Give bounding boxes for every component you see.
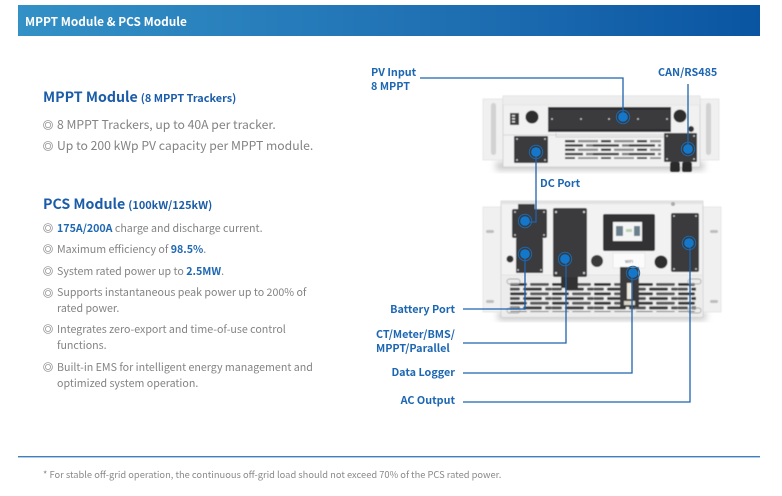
footer rule [18, 456, 760, 457]
bullet: PV capacity: Up to 200 kWp PV capacity per MPPT module. [57, 136, 313, 154]
illustration: PCS module device [483, 201, 721, 320]
callout: AC output [400, 236, 696, 408]
callout: DC port [518, 145, 581, 228]
callout: data logger: Data Logger [391, 364, 455, 380]
callout: PV input [371, 64, 630, 124]
bullet: EMS [44, 360, 313, 391]
callout: data logger [391, 266, 640, 380]
chassis [503, 96, 700, 167]
callout: PV input: 8 MPPT [371, 78, 410, 94]
footnote: * For stable off-grid operation, the continuous off-grid load should not exceed 70% of the PCS rated power. [43, 467, 501, 481]
callout: PV input: PV Input [371, 64, 417, 80]
callout: AC output: AC Output [400, 392, 455, 408]
bullet: zero export [44, 322, 286, 353]
black port panels [512, 204, 699, 288]
heading: MPPT module: MPPT Module (8 MPPT Trackers) [43, 87, 236, 107]
bullet: trackers: 8 MPPT Trackers, up to 40A per tracker. [57, 115, 276, 133]
callout: CT/Meter/BMS/MPPT/Parallel [376, 252, 572, 356]
callout: CT/Meter/BMS/MPPT/Parallel: MPPT/Parallel [376, 340, 450, 356]
bullet: rated power: System rated power up to 2.5MW. [57, 264, 224, 279]
callout: battery port: Battery Port [390, 301, 455, 317]
switch block [510, 113, 519, 125]
callout: DC port: DC Port [540, 175, 581, 191]
CAN panel [664, 133, 697, 172]
PV input panel [548, 107, 671, 137]
panel: PCS module text [43, 194, 313, 391]
DC port panel [514, 136, 548, 163]
wifi module: WIFI [625, 259, 633, 265]
header bar: MPPT Module & PCS Module [25, 13, 187, 30]
vent slots [565, 140, 661, 159]
panel: MPPT module text [43, 87, 313, 154]
data logger [620, 267, 639, 307]
bullet: peak power: Supports instantaneous peak power up to 200% of [57, 285, 307, 300]
callout: battery port [390, 247, 532, 317]
bullet: peak power: rated power. [57, 301, 119, 316]
bullet: EMS: Built-in EMS for intelligent energy management and [57, 360, 313, 375]
vent slots [510, 283, 696, 312]
rack ears [483, 99, 719, 160]
bullet: peak power [44, 285, 307, 316]
rack ears [483, 207, 721, 312]
bullet: zero export: Integrates zero-export and time-of-use control [57, 322, 286, 337]
callout: CT/Meter/BMS/MPPT/Parallel: CT/Meter/BMS/ [376, 326, 455, 342]
heading: PCS module: PCS Module (100kW/125kW) [43, 194, 212, 214]
illustration: MPPT module device [483, 96, 719, 172]
wifi module [613, 253, 645, 268]
handles [507, 279, 701, 313]
callout: CAN/RS485 [658, 64, 717, 156]
touch screen [603, 214, 655, 251]
bullet: efficiency: Maximum efficiency of 98.5%. [57, 242, 206, 257]
bullet: EMS: optimized system operation. [57, 376, 198, 391]
callout: CAN/RS485: CAN/RS485 [658, 64, 717, 80]
chassis [501, 201, 703, 317]
header bar [18, 5, 760, 36]
small connectors [506, 202, 675, 268]
bullet: current: 175A/200A charge and discharge current. [57, 221, 263, 236]
rotary knobs [526, 110, 694, 132]
bullet: zero export: functions. [57, 338, 107, 353]
